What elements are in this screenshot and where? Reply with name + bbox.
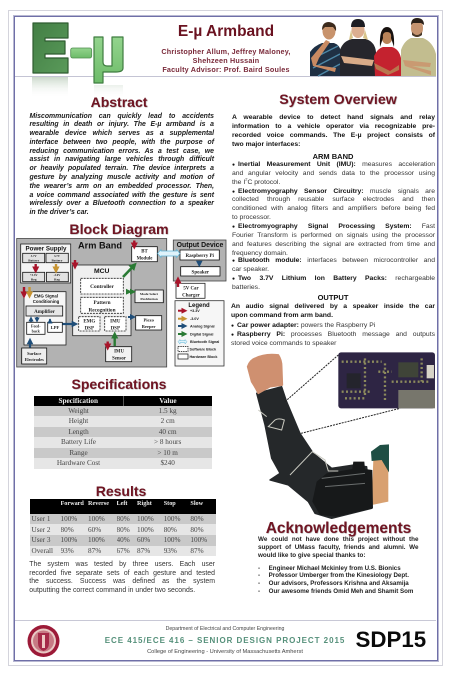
bullet: bluetooth: car speaker.	[232, 266, 269, 273]
bullet: signal processing	[232, 223, 435, 257]
legend	[175, 301, 224, 366]
MCU power arrow	[74, 260, 76, 266]
MCU: EMG	[83, 320, 95, 324]
specifications table: Range	[69, 449, 88, 457]
bullet: signal processing: frequency domain.	[232, 250, 288, 257]
mode select: Mode Select	[140, 292, 159, 296]
output intro: upon command from arm band.	[231, 312, 333, 319]
bullet: batteries: Two 3.7V Lithium Ion Battery Packs: rechargeable	[238, 275, 435, 282]
MCU: DSP	[111, 326, 120, 332]
bullet: EMG circuitry	[232, 188, 435, 221]
abstract text: in the driver’s car.	[30, 209, 89, 216]
bullet: car adapter: Car power adapter: powers the Raspberry Pi	[237, 322, 375, 329]
legend: Hardware Block	[190, 355, 218, 359]
results text: The system was tested by three users. Each user	[29, 561, 215, 568]
icon: university seal	[28, 625, 60, 657]
heading: abstract: Abstract	[91, 94, 147, 110]
LPF to DSP arrow	[62, 323, 75, 325]
power supply: Power Supply	[26, 246, 67, 252]
car charger: Charger	[182, 293, 201, 298]
output intro: An audio signal delivered by a speaker inside the car	[231, 303, 435, 310]
heading: specifications: Specifications	[72, 376, 166, 392]
bullet: raspberry pi: stored voice commands to speaker	[231, 340, 336, 347]
thanks list: - Professor Umberger from the Kinesiology Dept.	[258, 572, 409, 579]
SDP15 label: SDP15	[356, 627, 426, 652]
bullet: signal processing: and features describing the signal are extracted from time and	[232, 241, 435, 248]
MCU	[73, 265, 131, 336]
power supply: -3.0V	[54, 273, 61, 277]
bullet: car adapter: ●	[231, 323, 234, 329]
results table	[30, 499, 216, 556]
results table: 60%	[88, 526, 101, 534]
thanks list: - Our awesome friends Omid Meh and Shamit Som	[258, 588, 413, 595]
bullet: bluetooth: Bluetooth module: interfaces between microcontroller and	[238, 257, 435, 264]
heading: block diagram: Block Diagram	[69, 222, 169, 238]
bullet: EMG circuitry: to processor.	[232, 214, 271, 221]
bullet: EMG circuitry: conditioned with analog filters and amplifiers before being fed	[232, 205, 435, 212]
results table: 100%	[60, 536, 77, 544]
team photo	[310, 18, 436, 77]
acknowledgements text: We could not have done this project without the	[258, 536, 418, 543]
footer college: College of Engineering - University of Massachusetts Amherst	[147, 648, 303, 654]
abstract text: wirelessly over a Bluetooth connection to a speaker	[30, 200, 214, 207]
MCU: Controller	[90, 284, 115, 290]
power supply: 3.7V	[31, 254, 37, 258]
bluetooth link	[158, 250, 180, 258]
abstract text: or heavily populated terrain. The device interprets a	[30, 165, 214, 172]
authors	[161, 46, 291, 74]
results table: 60%	[137, 536, 150, 544]
heading: output: OUTPUT	[318, 293, 348, 302]
wire	[258, 410, 338, 475]
bullet: IMU	[232, 161, 435, 186]
bullet: bluetooth	[232, 257, 435, 273]
specifications table: > 10 m	[157, 449, 178, 457]
specifications table: 1.5 kg	[159, 407, 177, 415]
digital link arrow	[123, 266, 134, 277]
abstract text: resulting in death or injury. The E-µ armband is a	[30, 121, 214, 128]
title: E-µ Armband	[178, 23, 274, 40]
person 2	[340, 19, 376, 76]
piezo beeper	[128, 316, 162, 330]
EMG power arrows	[24, 287, 30, 295]
authors: Shehzeen Hussain	[193, 56, 259, 65]
specifications table: Hardware Cost	[57, 459, 100, 467]
mode select	[129, 290, 163, 303]
armband module	[312, 462, 373, 517]
bullet: signal processing: ●	[232, 224, 235, 230]
heading: arm band: ARM BAND	[313, 152, 353, 160]
results table: 100%	[137, 526, 154, 534]
bullet: EMG circuitry: ●	[232, 189, 235, 195]
results table: 93%	[60, 547, 74, 555]
car charger: 5V Car	[183, 286, 199, 292]
results text: recorded five separate sets of each gesture and tested	[29, 570, 215, 577]
specifications table: > 8 hours	[154, 438, 181, 446]
results table: 80%	[164, 526, 177, 534]
overview intro: information to a vehicle operator via recognizable pre-	[232, 123, 435, 130]
legend: -3.0V	[190, 317, 199, 321]
BT module: BT	[141, 250, 148, 254]
specifications table: Length	[68, 428, 89, 436]
arm photo	[246, 352, 435, 519]
bullet: IMU: Inertial Measurement Unit (IMU): measures acceleration	[238, 161, 435, 168]
heading: system overview: System Overview	[279, 92, 397, 108]
EMG conditioning	[24, 292, 66, 345]
abstract text: a voice command associated with the gesture is sent	[30, 192, 214, 199]
output device: Raspberry Pi	[185, 254, 215, 259]
overview intro: two major interfaces:	[232, 141, 300, 148]
PCB photo	[338, 352, 435, 408]
results table: 80%	[116, 526, 130, 534]
arm band panel	[17, 238, 167, 367]
results table: User 3	[32, 536, 50, 544]
upper arm and sleeve	[371, 444, 389, 505]
authors: Faculty Advisor: Prof. Baird Soules	[162, 65, 290, 74]
results table: 100%	[88, 536, 105, 544]
power supply: Reg	[54, 278, 60, 282]
thanks list: - Engineer Michael Mckinley from U.S. Bionics	[258, 565, 401, 572]
results table: 80%	[116, 515, 130, 523]
specifications table: Specification	[58, 397, 98, 405]
power supply: +3.3V	[30, 273, 38, 277]
abstract text: the wearer’s arm on an embedded processor. Then,	[30, 183, 214, 190]
acknowledgements text: support of UMass faculty, friends and alumni. We	[258, 544, 418, 551]
car charger	[176, 280, 205, 298]
thanks list: - Our advisors, Professors Krishna and Aksamija	[258, 580, 409, 587]
power supply: 3.7V	[54, 254, 61, 258]
MCU: Pattern	[93, 300, 111, 306]
results table: 100%	[60, 515, 77, 523]
EMG conditioning: EMG Signal	[34, 294, 58, 298]
abstract text: interface between two people, with the purpose of	[30, 139, 214, 146]
results table: 40%	[116, 536, 130, 544]
results table: 87%	[88, 547, 101, 555]
person 4	[401, 18, 436, 76]
leader lines	[285, 355, 400, 433]
results table: 80%	[190, 515, 204, 523]
sleeve	[257, 387, 372, 518]
EMG conditioning: Amplifier	[34, 310, 56, 315]
EMG conditioning: LPF	[51, 325, 60, 330]
EMG conditioning: Conditioning	[33, 299, 60, 304]
bullet: batteries: batteries.	[232, 284, 260, 291]
authors: Christopher Allum, Jeffrey Maloney,	[161, 46, 291, 56]
BT module: Module	[137, 256, 152, 262]
results table: Stop	[164, 500, 176, 507]
overview intro	[232, 114, 436, 148]
acknowledgements text: would like to give special thanks to:	[258, 552, 365, 559]
surface electrodes: Surface	[27, 351, 41, 356]
bullet: raspberry pi	[231, 331, 435, 347]
EMG conditioning: Feed-	[31, 324, 41, 328]
heading: results: Results	[96, 482, 146, 498]
bullet: IMU: ●	[232, 162, 235, 168]
bullet: IMU: and angular velocity and sends data to the processor using	[232, 170, 435, 177]
results table: 93%	[164, 547, 177, 555]
piezo beeper: Piezo	[143, 318, 155, 323]
abstract text: reducing communication errors. As a test case, we	[30, 148, 214, 155]
specifications table: Value	[159, 397, 177, 405]
legend: +3.3V	[190, 309, 200, 313]
person 1	[310, 22, 341, 76]
results table: 100%	[137, 515, 154, 523]
bullet: signal processing: Fourier Transform is performed on signals using the processor	[232, 232, 435, 239]
specifications table: Height	[69, 417, 88, 425]
surface electrodes: Electrodes	[25, 357, 44, 362]
results table: 100%	[88, 515, 105, 523]
power supply	[21, 244, 71, 283]
results table: Reverse	[88, 500, 109, 507]
abstract text: wearable device which serves as a supplemental	[30, 130, 214, 137]
logo: E-µ	[32, 22, 124, 90]
block diagram	[16, 238, 226, 368]
heading: acknowledgements: Acknowledgements	[266, 520, 411, 536]
results table: 100%	[164, 515, 180, 523]
overview intro: A wearable device to detect hand signals and relay	[232, 114, 435, 121]
mode select: Pushbutton	[140, 297, 158, 301]
MCU: IMU	[110, 320, 121, 324]
legend: Analog Signal	[190, 324, 215, 328]
output device: Output Device	[177, 242, 224, 249]
surface electrodes	[22, 341, 47, 364]
abstract text: assist in navigating large vehicles through difficult	[30, 156, 214, 163]
fist	[248, 355, 282, 393]
bullet: signal processing: Electromyography Signal Processing System: Fast	[238, 223, 435, 230]
results table: 80%	[190, 526, 204, 534]
results text	[29, 560, 215, 594]
overview intro: recorded voice commands. The E-µ project consists of	[232, 132, 435, 139]
IMU sensor: Sensor	[112, 356, 127, 362]
output device: Speaker	[192, 270, 210, 276]
arm band panel: Arm Band	[78, 240, 122, 250]
specifications table	[34, 396, 212, 469]
EMG conditioning: back	[32, 328, 41, 334]
BT module	[132, 240, 157, 262]
IMU sensor	[106, 335, 132, 362]
specifications table: Battery Life	[61, 438, 96, 446]
acknowledgements text	[258, 536, 418, 559]
output intro	[231, 303, 435, 319]
results table: 87%	[137, 547, 150, 555]
legend: Bluetooth Signal	[190, 340, 219, 344]
results table: Slow	[190, 500, 203, 507]
header rule	[15, 76, 436, 77]
results table: Overall	[32, 547, 53, 555]
IMU sensor: IMU	[114, 350, 124, 354]
MCU: MCU	[94, 268, 110, 275]
MCU: Recognition	[88, 308, 116, 314]
footer rule	[15, 620, 436, 621]
piezo beeper: Beeper	[142, 324, 156, 329]
specifications table: $240	[160, 459, 175, 467]
legend: Software Block	[190, 347, 217, 351]
bullet: raspberry pi: ●	[231, 332, 234, 338]
bullet: batteries: ●	[232, 276, 235, 282]
bullet: raspberry pi: Raspberry Pi: processes Bluetooth message and outputs	[237, 331, 435, 338]
results text: outputting the correct command in under two seconds.	[29, 587, 195, 594]
footer department: Department of Electrical and Computer Engineering	[166, 626, 284, 632]
legend: Legend	[188, 303, 210, 309]
results table: 100%	[190, 536, 207, 544]
results table: 67%	[116, 547, 130, 555]
results table: 87%	[190, 547, 204, 555]
abstract text: gesture by analyzing muscle activity and motion of	[30, 174, 214, 181]
specifications table: 40 cm	[159, 428, 177, 436]
abstract text: Miscommunication can quickly lead to accidents	[30, 112, 214, 120]
bullet: batteries	[232, 275, 435, 291]
thanks list	[258, 565, 413, 595]
bullet: EMG circuitry: collected through reusable surface electrodes and then	[232, 196, 435, 203]
results table: Forward	[60, 500, 84, 507]
MCU: DSP	[85, 326, 94, 332]
bullet: bluetooth: ●	[232, 258, 235, 264]
power supply: Battery	[28, 258, 39, 262]
results table: Left	[116, 500, 128, 507]
power supply: Battery	[52, 258, 63, 262]
results text: the success. Success was defined as the system	[29, 578, 215, 585]
person 3	[374, 27, 401, 76]
results table: User 2	[32, 526, 50, 534]
results table: 100%	[164, 536, 180, 544]
specifications table: 2 cm	[161, 417, 175, 425]
output device	[173, 240, 226, 281]
results table: 80%	[60, 526, 74, 534]
power supply: Reg	[31, 278, 37, 282]
footer course title: ECE 415/ECE 416 – SENIOR DESIGN PROJECT 2015	[105, 636, 345, 644]
results table: Right	[137, 500, 152, 507]
specifications table: Weight	[68, 407, 89, 415]
bullet: EMG circuitry: Electromyography Sensor Circuitry: muscle signals are	[238, 188, 435, 195]
bullet: IMU: the I2C protocol.	[232, 177, 280, 186]
legend: Digital Signal	[190, 332, 213, 336]
abstract text	[30, 112, 215, 216]
results table: User 1	[32, 515, 50, 523]
